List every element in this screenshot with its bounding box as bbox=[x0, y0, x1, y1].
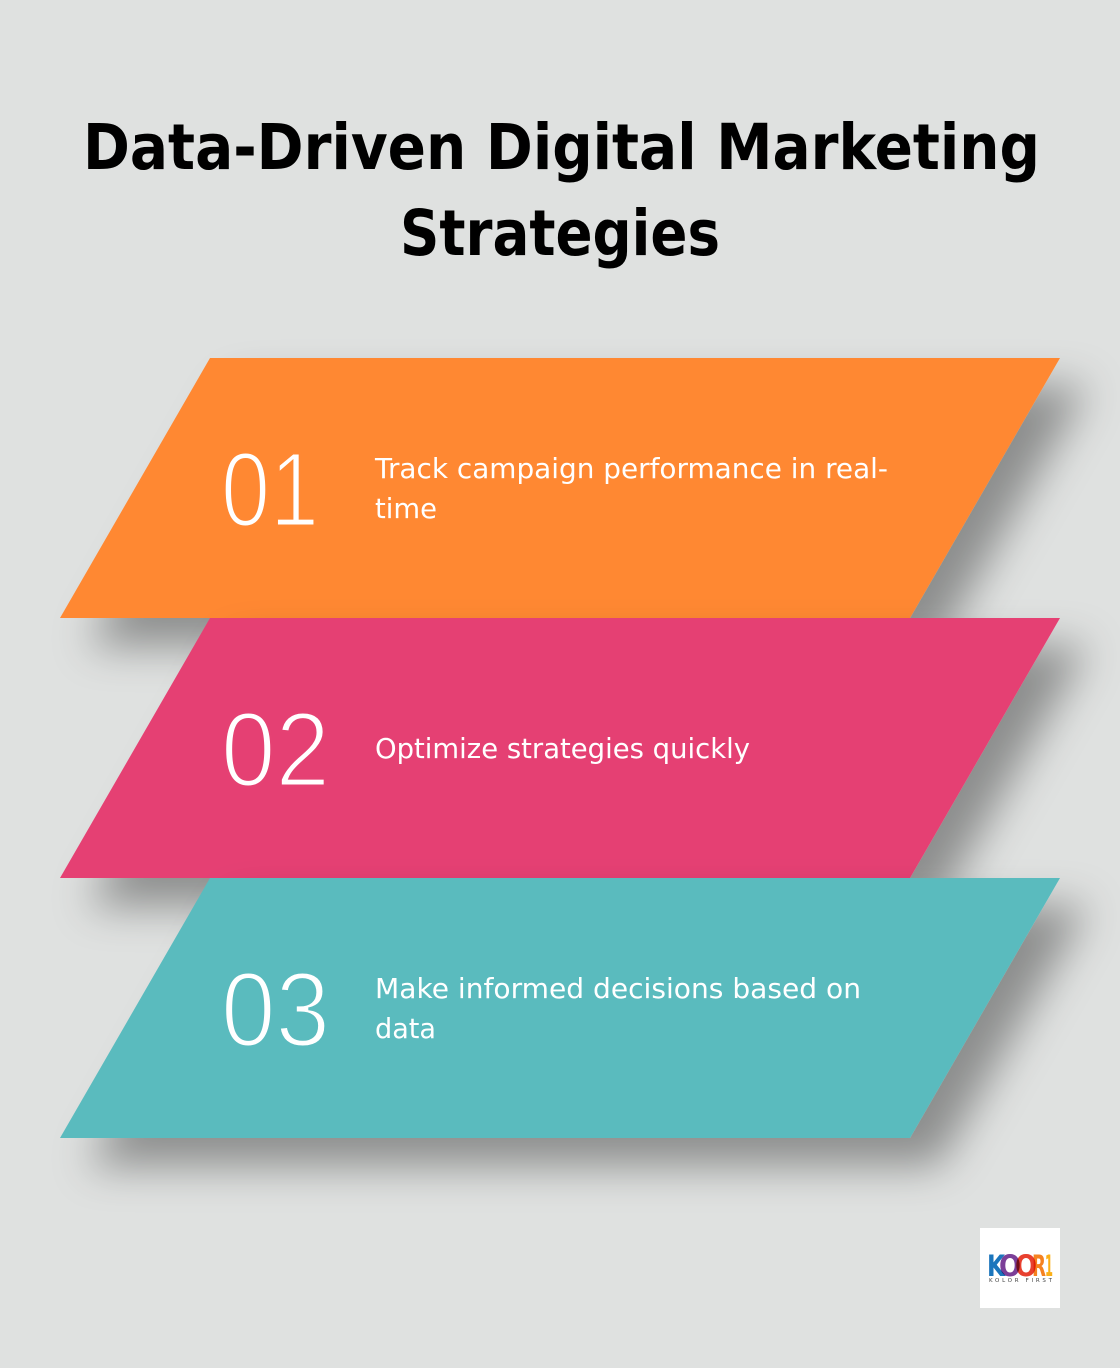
text: track campaign bbox=[374, 452, 888, 525]
logo wordmark: K bbox=[987, 1249, 1006, 1283]
title bbox=[83, 111, 1040, 270]
text: make informed bbox=[375, 972, 861, 1045]
logo wordmark bbox=[987, 1249, 1053, 1283]
text: make informed: data bbox=[375, 1012, 436, 1045]
text: track campaign: Track campaign performance in real- bbox=[374, 452, 888, 485]
text: track campaign: time bbox=[375, 492, 437, 525]
text: make informed: Make informed decisions based on bbox=[375, 972, 861, 1005]
number 03: 03 bbox=[221, 951, 330, 1069]
teal ribbon bbox=[60, 878, 1060, 1138]
pink ribbon bbox=[60, 618, 1060, 878]
title: Data-Driven Digital Marketing bbox=[83, 111, 1040, 184]
logo wordmark: O bbox=[1015, 1249, 1037, 1283]
logo wordmark: O bbox=[999, 1249, 1021, 1283]
logo background bbox=[980, 1228, 1060, 1308]
panel: step 02 bbox=[60, 618, 1060, 878]
panel: step 03 bbox=[60, 878, 1060, 1138]
text: optimize: Optimize strategies quickly bbox=[375, 732, 750, 765]
number 02: 02 bbox=[221, 691, 330, 809]
title: Strategies bbox=[400, 197, 720, 270]
number 01: 01 bbox=[221, 431, 319, 549]
logo: 1 bbox=[1045, 1249, 1053, 1283]
panel: step 01 bbox=[60, 358, 1060, 618]
logo bbox=[980, 1228, 1060, 1308]
logo wordmark: R bbox=[1032, 1249, 1046, 1283]
logo tagline: KOLOR FIRST bbox=[989, 1278, 1053, 1284]
orange ribbon bbox=[60, 358, 1060, 618]
